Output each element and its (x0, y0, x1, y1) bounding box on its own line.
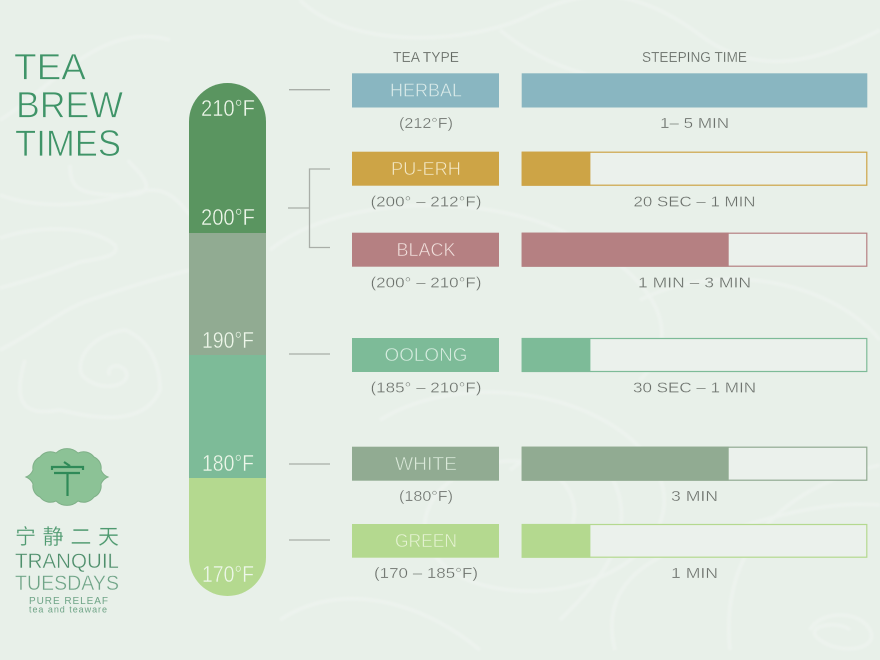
row: herbal: HERBAL (390, 80, 462, 100)
row: oolong: 30 SEC – 1 MIN (633, 380, 756, 396)
thermometer bands (189, 83, 266, 596)
row: black (352, 233, 867, 292)
logo name (15, 549, 119, 595)
row: pu-erh: (200° – 212°F) (370, 194, 482, 210)
column headings: TEA TYPE (393, 49, 459, 66)
logo tagline: tea and teaware (29, 604, 107, 614)
title: BREW (16, 84, 123, 126)
thermometer labels: 200°F (201, 204, 255, 230)
row: oolong: OOLONG (384, 345, 468, 365)
title: TEA (14, 46, 86, 87)
row: herbal: 1– 5 MIN (660, 115, 729, 132)
row: pu-erh: PU-ERH (391, 159, 461, 179)
row: green: 1 MIN (671, 565, 718, 582)
row: white (352, 447, 867, 505)
row: pu-erh: 20 SEC – 1 MIN (634, 194, 756, 210)
thermometer labels: 170°F (202, 561, 254, 587)
title (14, 46, 123, 164)
thermometer labels: 180°F (202, 450, 254, 476)
row: green: (170 – 185°F) (374, 565, 478, 582)
row: black: (200° – 210°F) (370, 274, 482, 292)
row: white: 3 MIN (671, 488, 718, 505)
row: green: GREEN (395, 531, 457, 551)
row: green (352, 524, 867, 582)
row: black: BLACK (396, 240, 456, 260)
logo name: TUESDAYS (15, 571, 119, 595)
row: white: WHITE (395, 454, 457, 474)
row: oolong: (185° – 210°F) (370, 380, 482, 396)
row: herbal: (212°F) (399, 115, 453, 132)
logo tagline (29, 596, 108, 614)
row: white: (180°F) (399, 488, 453, 505)
thermometer labels: 210°F (201, 95, 255, 121)
icon: cloud emblem (26, 449, 108, 505)
logo (15, 449, 119, 614)
thermometer labels (201, 95, 255, 587)
row: herbal (352, 73, 867, 132)
row: pu-erh (352, 152, 867, 210)
connector lines (288, 90, 330, 540)
logo name: TRANQUIL (15, 549, 119, 573)
thermometer labels: 190°F (202, 327, 254, 353)
column headings (393, 49, 747, 66)
title: TIMES (15, 123, 121, 164)
row: oolong (352, 338, 867, 396)
thermometer (189, 83, 266, 596)
logo chinese name: 宁静二天 (15, 526, 119, 549)
logo tagline: PURE RELEAF (29, 596, 108, 607)
column headings: STEEPING TIME (642, 49, 747, 66)
row: black: 1 MIN – 3 MIN (638, 274, 751, 292)
